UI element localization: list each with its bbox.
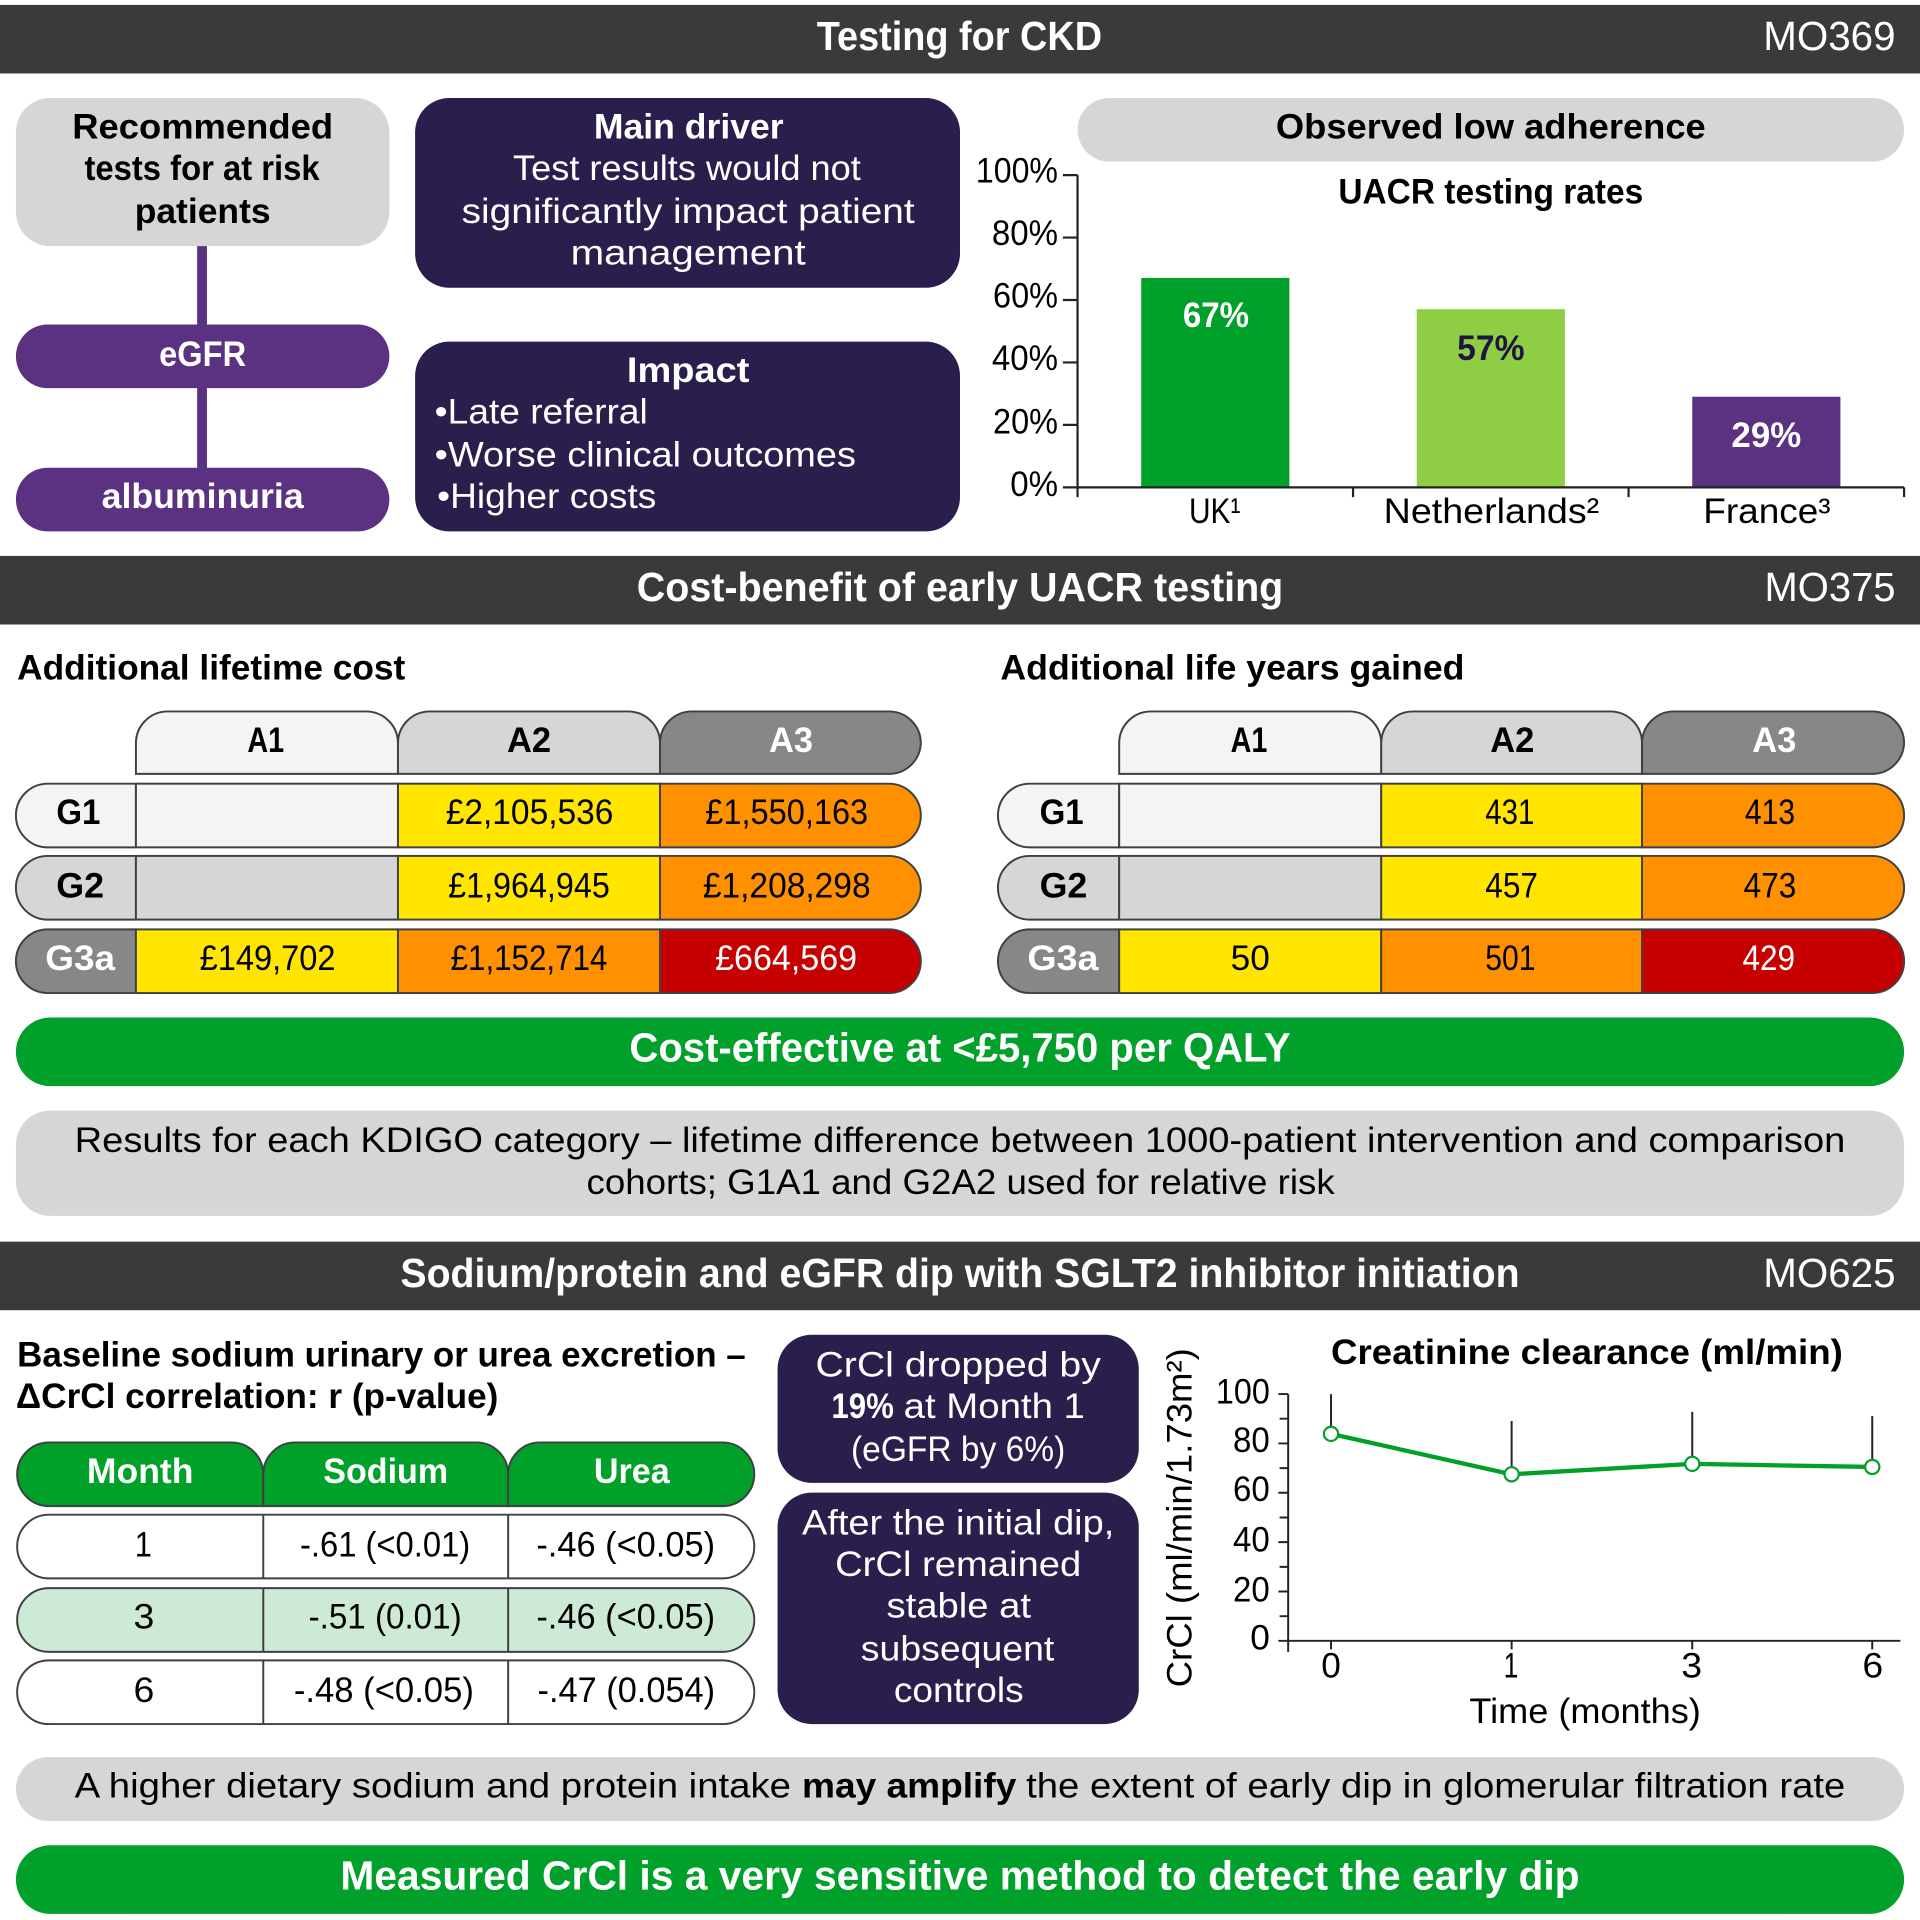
table: additional life years gained: G2 xyxy=(1040,866,1087,906)
table: additional life years gained: 473 xyxy=(1744,866,1796,906)
bar chart: UACR testing rates: 29% xyxy=(1731,415,1801,455)
line chart: creatinine clearance: Time (months) xyxy=(1469,1691,1701,1731)
panel: main driver: management xyxy=(571,232,806,272)
section header: Testing for CKD: MO369 xyxy=(1763,13,1896,59)
banner: cost-effective: Cost-effective at <£5,750 per QALY xyxy=(629,1025,1291,1071)
section: sodium/protein and eGFR dip xyxy=(0,1242,1920,1914)
table: additional lifetime cost: G1 xyxy=(56,792,100,832)
line chart: creatinine clearance: 20 xyxy=(1233,1570,1270,1610)
table: baseline sodium and urea correlation: Urea xyxy=(594,1451,670,1491)
table: additional life years gained: G3a xyxy=(1027,938,1099,978)
table: baseline sodium and urea correlation: ΔCrCl correlation: r (p-value) xyxy=(16,1376,498,1416)
table: additional lifetime cost: G3a xyxy=(45,938,115,978)
table: additional life years gained: 457 xyxy=(1485,866,1538,906)
table: additional lifetime cost: £1,550,163 xyxy=(705,792,868,832)
callout: CrCl dropped: (eGFR by 6%) xyxy=(851,1429,1065,1469)
table: baseline sodium and urea correlation: -.47 (0.054) xyxy=(538,1670,715,1710)
panel: impact: •Higher costs xyxy=(437,476,656,516)
table: additional lifetime cost: £1,964,945 xyxy=(448,866,610,906)
bar chart: UACR testing rates: 67% xyxy=(1183,295,1249,335)
bar chart: UACR testing rates: 80% xyxy=(992,213,1058,253)
panel: main driver: Test results would not xyxy=(513,148,861,188)
table: additional life years gained: A3 xyxy=(1752,720,1796,760)
panel: recommended tests: Recommended xyxy=(72,106,333,146)
callout: CrCl remained stable: controls xyxy=(894,1670,1024,1710)
banner: cost-effective xyxy=(16,1018,1904,1086)
table: baseline sodium and urea correlation: -.46 (<0.05) xyxy=(536,1524,715,1564)
table: additional lifetime cost: A3 xyxy=(769,720,813,760)
table: additional life years gained: A1 xyxy=(1231,720,1267,760)
table: baseline sodium and urea correlation: Sodium xyxy=(323,1451,448,1491)
callout: CrCl dropped: 19% xyxy=(831,1386,894,1426)
section header: cost-benefit: MO375 xyxy=(1764,564,1896,610)
callout: CrCl dropped: CrCl dropped by xyxy=(816,1344,1101,1384)
panel: recommended tests: patients xyxy=(135,191,271,231)
table: additional life years gained: G1 xyxy=(1040,792,1084,832)
table: additional lifetime cost: £1,152,714 xyxy=(451,938,607,978)
callout: CrCl dropped xyxy=(778,1335,1139,1483)
panel: recommended tests: eGFR xyxy=(159,334,246,374)
panel: recommended tests: albuminuria xyxy=(102,476,304,516)
table: additional life years gained: 429 xyxy=(1742,938,1795,978)
bar chart: UACR testing rates xyxy=(976,150,1904,531)
note: dietary sodium: may amplify xyxy=(802,1766,1017,1806)
bar chart: UACR testing rates: 0% xyxy=(1010,464,1058,504)
bar chart: UACR testing rates: 100% xyxy=(976,150,1058,190)
table: additional lifetime cost: £664,569 xyxy=(715,938,857,978)
panel: recommended tests: tests for at risk xyxy=(84,148,320,188)
panel: impact: Impact xyxy=(627,350,750,390)
note: dietary sodium: the extent of early dip in glomerular filtration rate xyxy=(1026,1766,1845,1806)
note: KDIGO results: cohorts; G1A1 and G2A2 used for relative risk xyxy=(587,1162,1335,1202)
table: additional lifetime cost: £149,702 xyxy=(200,938,336,978)
bar chart: UACR testing rates: 57% xyxy=(1457,328,1524,368)
callout: CrCl remained stable: CrCl remained xyxy=(835,1544,1081,1584)
line chart: creatinine clearance: 40 xyxy=(1233,1519,1270,1559)
table: baseline sodium and urea correlation: Month xyxy=(87,1451,193,1491)
panel: recommended tests xyxy=(16,98,389,531)
bar chart: UACR testing rates: 20% xyxy=(993,401,1058,441)
table: baseline sodium and urea correlation xyxy=(16,1335,754,1724)
bar chart: UACR testing rates: Netherlands² xyxy=(1384,491,1599,531)
panel: main driver xyxy=(415,98,960,288)
table: additional life years gained: 431 xyxy=(1485,792,1534,832)
section: cost-benefit of early UACR testing xyxy=(0,556,1920,1216)
table: baseline sodium and urea correlation: -.51 (0.01) xyxy=(309,1597,462,1637)
line chart: creatinine clearance: 1 xyxy=(1504,1646,1518,1686)
banner: measured CrCl: Measured CrCl is a very sensitive method to detect the early dip xyxy=(340,1852,1580,1898)
line chart: creatinine clearance: 6 xyxy=(1862,1646,1883,1686)
callout: CrCl remained stable xyxy=(778,1493,1139,1724)
section header: Testing for CKD: Testing for CKD xyxy=(817,13,1102,59)
panel: main driver: Main driver xyxy=(594,106,784,146)
panel: impact: •Worse clinical outcomes xyxy=(435,435,856,475)
section: testing for CKD xyxy=(0,5,1920,531)
section header: Testing for CKD xyxy=(0,5,1920,73)
table: additional life years gained xyxy=(998,648,1904,993)
panel: main driver: significantly impact patient xyxy=(462,191,915,231)
callout: CrCl remained stable: subsequent xyxy=(861,1628,1054,1668)
note: KDIGO results xyxy=(16,1111,1904,1216)
callout: CrCl remained stable: After the initial dip, xyxy=(802,1502,1114,1542)
table: baseline sodium and urea correlation: 1 xyxy=(135,1524,152,1564)
note: dietary sodium xyxy=(16,1757,1904,1821)
table: additional lifetime cost: Additional lifetime cost xyxy=(17,648,405,688)
section header: sodium/protein: MO625 xyxy=(1763,1250,1896,1296)
section header: sodium/protein: Sodium/protein and eGFR dip with SGLT2 inhibitor initiation xyxy=(400,1250,1520,1296)
table: additional lifetime cost: A1 xyxy=(247,720,284,760)
table: additional life years gained: Additional life years gained xyxy=(1000,648,1464,688)
panel: impact xyxy=(415,342,960,531)
table: additional lifetime cost: G2 xyxy=(56,866,104,906)
bar chart: UACR testing rates: UK¹ xyxy=(1189,491,1241,531)
table: additional life years gained: A2 xyxy=(1490,720,1534,760)
line chart: creatinine clearance: Creatinine clearance (ml/min) xyxy=(1331,1332,1843,1372)
table: additional lifetime cost: £1,208,298 xyxy=(703,866,871,906)
section header: cost-benefit xyxy=(0,556,1920,624)
table: additional lifetime cost: £2,105,536 xyxy=(446,792,613,832)
bar chart: UACR testing rates: UACR testing rates xyxy=(1338,171,1643,211)
bar chart: UACR testing rates: France³ xyxy=(1703,491,1831,531)
table: additional life years gained: 50 xyxy=(1231,938,1270,978)
note: dietary sodium: A higher dietary sodium and protein intake xyxy=(75,1766,791,1806)
callout: CrCl dropped: at Month 1 xyxy=(904,1386,1085,1426)
callout: CrCl remained stable: stable at xyxy=(887,1586,1031,1626)
bar chart: UACR testing rates: 60% xyxy=(993,275,1058,315)
section header: sodium/protein xyxy=(0,1242,1920,1310)
line chart: creatinine clearance: CrCl (ml/min/1.73m²) xyxy=(1159,1348,1199,1687)
table: additional lifetime cost: A2 xyxy=(507,720,551,760)
line chart: creatinine clearance: 80 xyxy=(1233,1420,1270,1460)
line chart: creatinine clearance xyxy=(1159,1332,1900,1731)
line chart: creatinine clearance: 60 xyxy=(1233,1469,1270,1509)
note: KDIGO results: Results for each KDIGO category – lifetime difference between 1000-patient intervention and comparison xyxy=(75,1120,1845,1160)
table: additional life years gained: 501 xyxy=(1485,938,1536,978)
line chart: creatinine clearance: 0 xyxy=(1321,1646,1341,1686)
bar chart: UACR testing rates: 40% xyxy=(992,338,1058,378)
line chart: creatinine clearance: 0 xyxy=(1250,1617,1270,1657)
heading: observed low adherence xyxy=(1078,98,1904,162)
table: additional lifetime cost xyxy=(16,648,921,993)
table: baseline sodium and urea correlation: 6 xyxy=(133,1670,154,1710)
table: baseline sodium and urea correlation: -.46 (<0.05) xyxy=(536,1597,715,1637)
table: baseline sodium and urea correlation: -.61 (<0.01) xyxy=(300,1524,470,1564)
line chart: creatinine clearance: 100 xyxy=(1216,1371,1270,1411)
table: additional life years gained: 413 xyxy=(1745,792,1795,832)
section header: cost-benefit: Cost-benefit of early UACR testing xyxy=(637,564,1283,610)
panel: impact: •Late referral xyxy=(435,392,648,432)
table: baseline sodium and urea correlation: Baseline sodium urinary or urea excretion – xyxy=(17,1335,746,1375)
table: baseline sodium and urea correlation: -.48 (<0.05) xyxy=(294,1670,474,1710)
table: baseline sodium and urea correlation: 3 xyxy=(133,1597,154,1637)
banner: measured CrCl xyxy=(16,1845,1904,1914)
heading: observed low adherence: Observed low adherence xyxy=(1276,106,1706,146)
line chart: creatinine clearance: 3 xyxy=(1681,1646,1702,1686)
